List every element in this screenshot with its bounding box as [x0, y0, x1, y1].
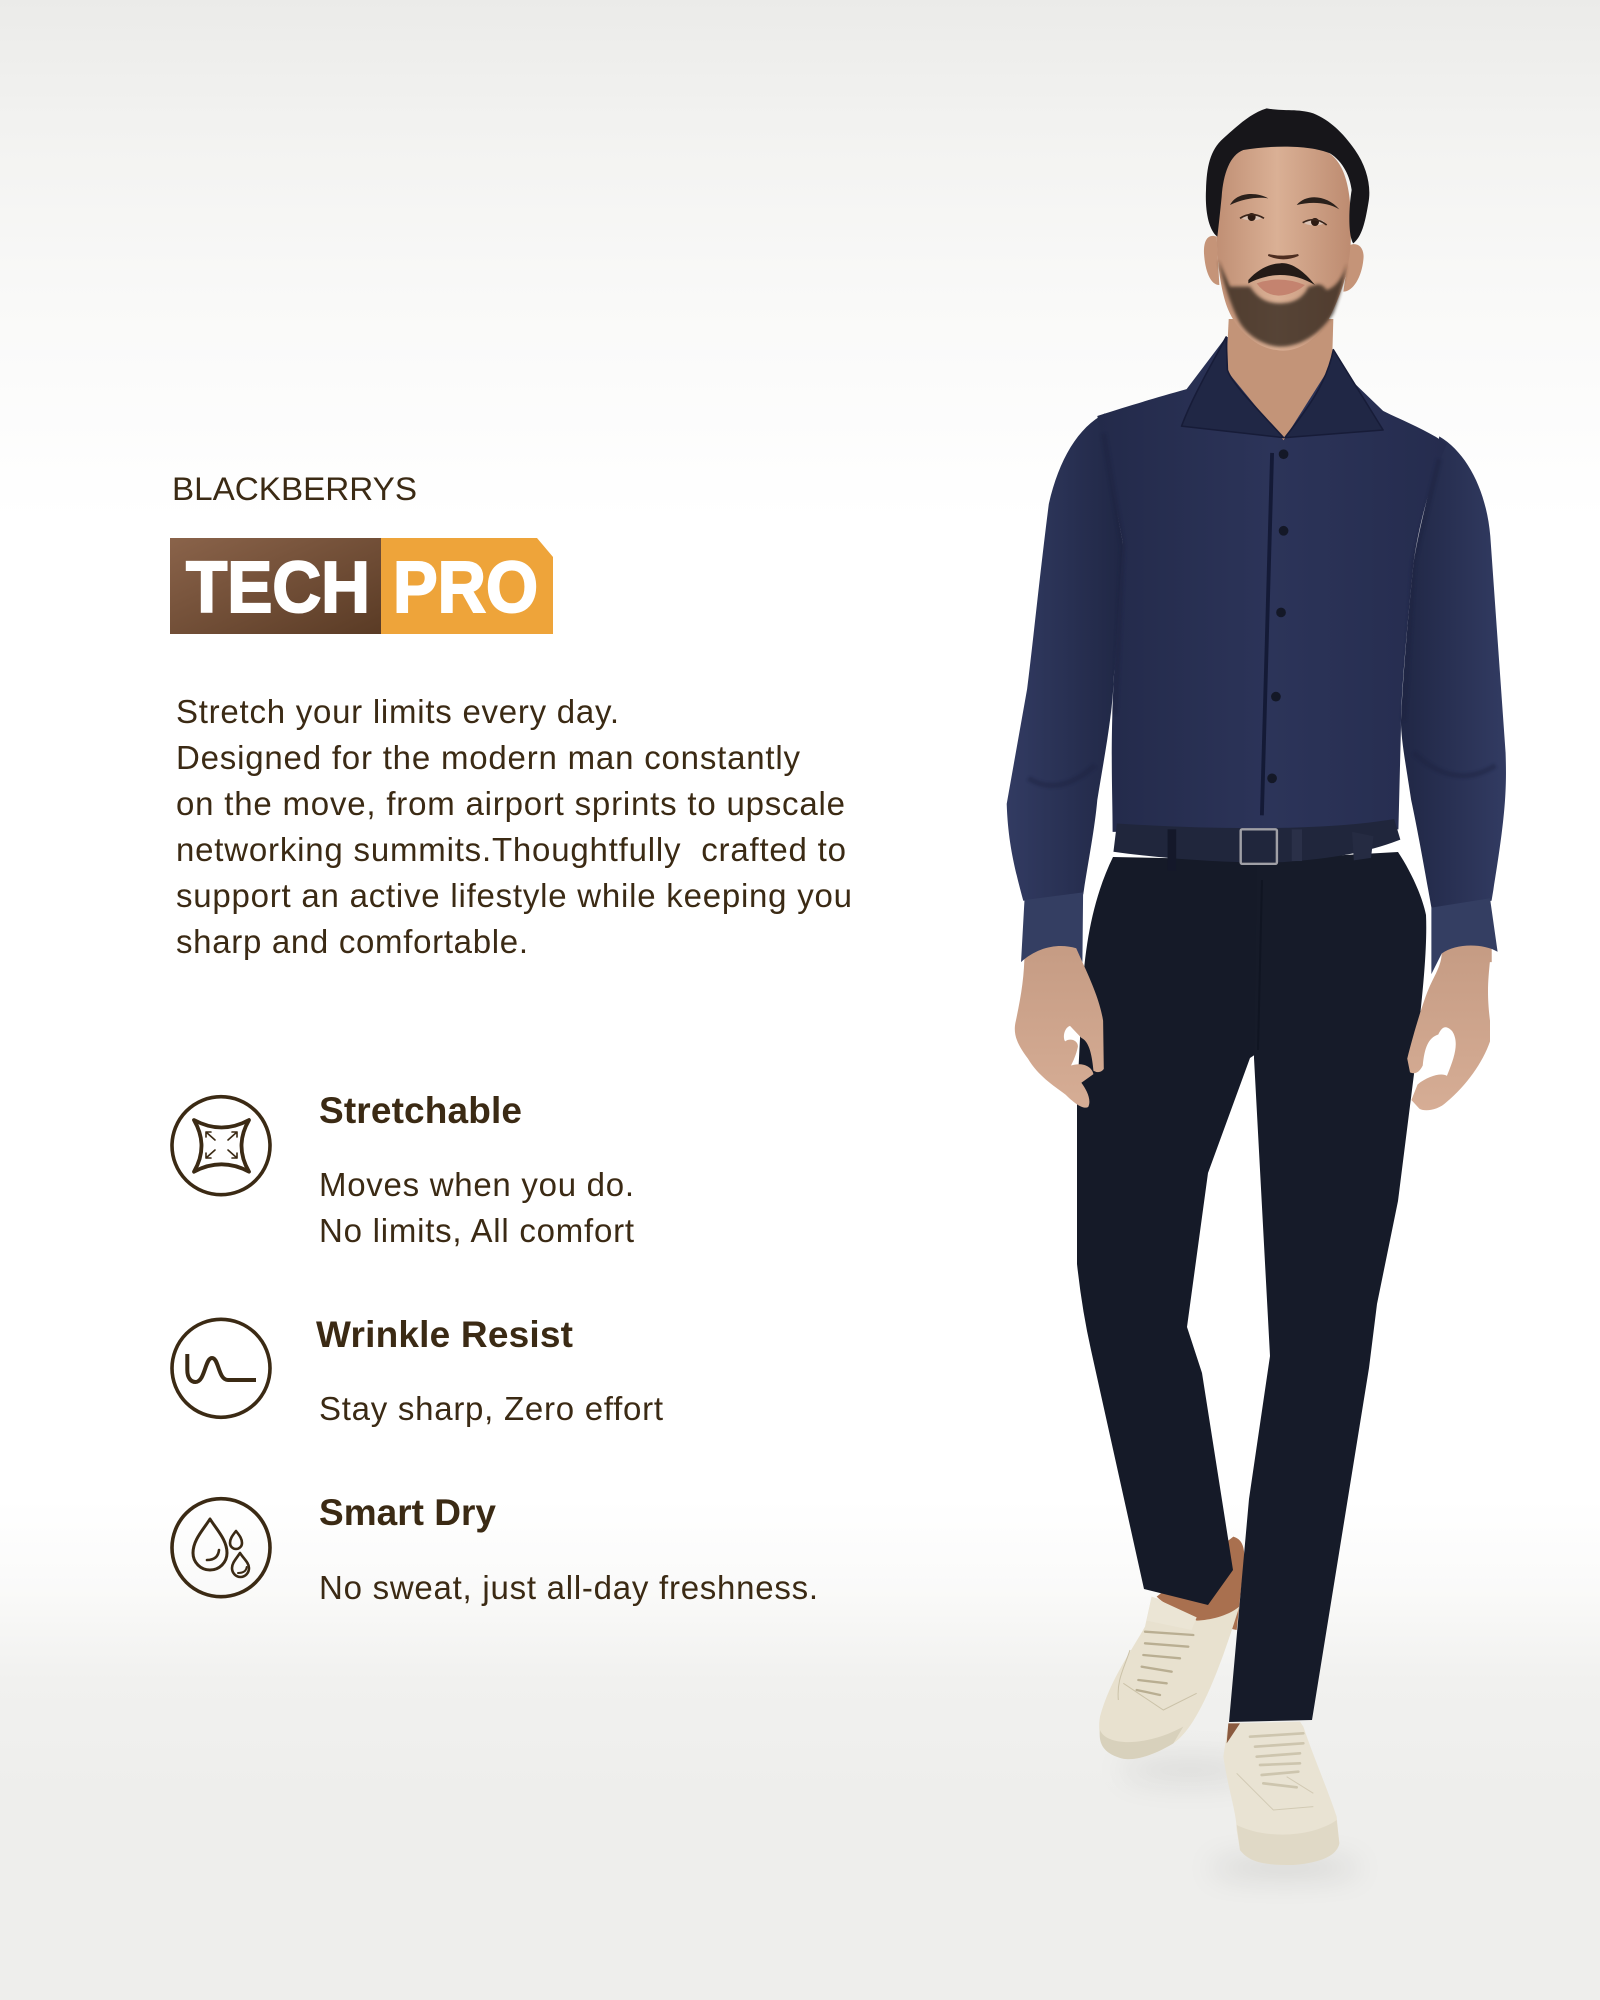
cuffs and belt: [1021, 819, 1498, 974]
eyes and brows: [1230, 194, 1339, 258]
left cuff: [1021, 892, 1083, 962]
right cuff: [1431, 898, 1498, 974]
intro paragraph: Designed for the modern man constantly: [176, 739, 800, 776]
shirt folds: [1028, 434, 1495, 785]
beard: [1218, 260, 1347, 347]
right sleeve: [1401, 436, 1506, 908]
intro paragraph: sharp and comfortable.: [176, 923, 528, 960]
collar: [1182, 337, 1383, 438]
icon: stretch square: [172, 1097, 270, 1195]
shoe shadows: [1120, 1756, 1360, 1876]
intro paragraph: [176, 693, 852, 960]
intro paragraph: support an active lifestyle while keeping you: [176, 877, 852, 914]
head: [1204, 108, 1369, 351]
trouser fly: [1258, 880, 1262, 1050]
belt: [1113, 819, 1400, 871]
left hand: [1015, 931, 1104, 1108]
description: stretchable: [319, 1166, 634, 1249]
feature: wrinkle resist: [172, 1314, 663, 1427]
front shoe: [1223, 1722, 1339, 1865]
ears: [1204, 236, 1364, 292]
description: smart dry: No sweat, just all-day freshness.: [319, 1569, 818, 1606]
sleeves and torso: [1007, 319, 1506, 908]
description: stretchable: Moves when you do.: [319, 1166, 634, 1203]
description: wrinkle resist: Stay sharp, Zero effort: [319, 1390, 663, 1427]
placket: [1262, 453, 1272, 815]
brand name: BLACKBERRYS: [172, 471, 417, 507]
feature: stretchable: [172, 1090, 634, 1249]
heading: wrinkle resist: Wrinkle Resist: [316, 1314, 573, 1355]
shirt torso: [1097, 337, 1447, 832]
logo: Tech Pro badge: TECH: [186, 548, 370, 628]
description: stretchable: No limits, All comfort: [319, 1212, 634, 1249]
lips: [1257, 280, 1305, 296]
model figure in navy shirt and trousers: [1007, 108, 1506, 1876]
hair: [1206, 108, 1369, 243]
icon: water drops: [172, 1499, 270, 1597]
front trouser leg: [1229, 852, 1426, 1722]
heading: stretchable: Stretchable: [319, 1090, 522, 1131]
right hand: [1407, 931, 1492, 1110]
feature: smart dry: [172, 1492, 818, 1606]
neck: [1226, 319, 1333, 440]
buttons: [1267, 449, 1288, 783]
icon: wrinkle line: [172, 1319, 270, 1417]
back shoe: [1099, 1537, 1244, 1759]
logo: Tech Pro badge: [170, 538, 553, 634]
intro paragraph: on the move, from airport sprints to upscale: [176, 785, 845, 822]
logo: Tech Pro badge: PRO: [393, 548, 538, 628]
face: [1216, 144, 1351, 351]
intro paragraph: Stretch your limits every day.: [176, 693, 619, 730]
left sleeve: [1007, 413, 1123, 901]
moustache: [1248, 263, 1315, 285]
heading: smart dry: Smart Dry: [319, 1492, 496, 1533]
back trouser leg: [1077, 857, 1262, 1605]
hands and cuffs: [1015, 931, 1492, 1110]
intro paragraph: networking summits.Thoughtfully crafted to: [176, 831, 846, 868]
